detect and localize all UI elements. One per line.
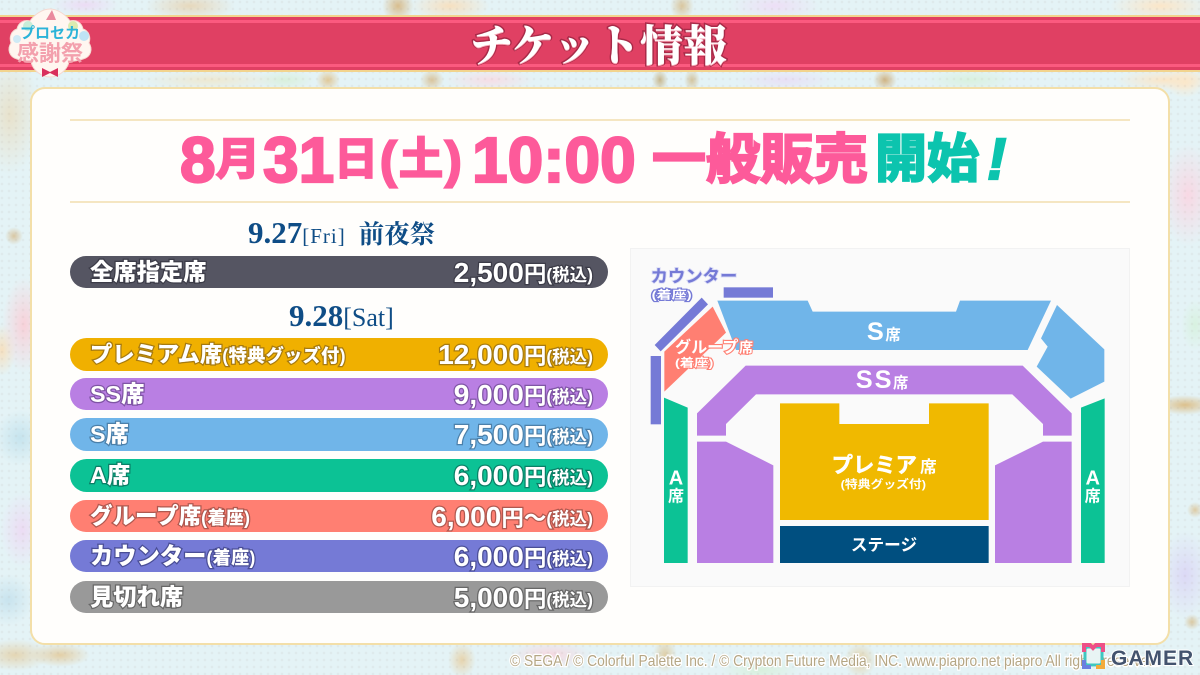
group seats: (着座) (675, 356, 714, 370)
group seats: グループ (675, 338, 738, 357)
price bar: SS: SS席 (90, 381, 144, 407)
price bar: obstructed view: 見切れ席 (90, 584, 183, 610)
price bar: group (70, 500, 608, 532)
date heading: 9.27: 9.27[Fri] 前夜祭 (248, 215, 435, 251)
premium seats (780, 403, 989, 520)
headline: sale start: 8 (180, 124, 216, 196)
headline: sale start: ( (380, 132, 397, 188)
logo: プロセカ (20, 25, 80, 42)
copyright: © SEGA / © Colorful Palette Inc. / © Crypton Future Media, INC. www.piapro.net piapro All rights reserved. (510, 653, 1160, 670)
headline: sale start: ) (445, 132, 462, 188)
header banner (0, 15, 1200, 72)
logo (8, 8, 92, 78)
premium seats: プレミア (832, 454, 917, 478)
price bar: counter: カウンター(着座) (90, 543, 256, 569)
price bar: A: A席 (90, 462, 130, 488)
price bar: S: 7,500円(税込) (454, 419, 593, 450)
A seats: 席 (1085, 487, 1101, 505)
price bar: premium (70, 338, 608, 371)
A seats: A (669, 468, 683, 490)
headline: sale start (180, 124, 1007, 196)
headline: sale start: 開始 (875, 131, 979, 189)
S seats (717, 301, 1104, 399)
headline: sale start: 土 (399, 135, 443, 184)
price bar: all reserved: 全席指定席 (90, 259, 206, 285)
stage (780, 526, 989, 563)
counter seats: カウンター (651, 266, 737, 286)
counter seats: (着座) (652, 288, 692, 302)
S seats: 席 (885, 326, 901, 344)
price bar: premium: 12,000円(税込) (438, 339, 593, 370)
price bar: all reserved: 2,500円(税込) (454, 257, 593, 288)
price bar: group: グループ席(着座) (90, 504, 250, 529)
SS seats: 席 (893, 374, 908, 392)
price bar: A (70, 459, 608, 492)
A seats (664, 398, 1105, 563)
price bar: obstructed view (70, 581, 608, 613)
date heading: 9.28: 9.28[Sat] (289, 298, 394, 333)
price bar: group: 6,000円～(税込) (431, 501, 593, 532)
price bar: premium: プレミアム席(特典グッズ付) (90, 342, 346, 367)
price bar: all reserved (70, 256, 608, 288)
price bar: S: S席 (90, 421, 129, 447)
headline: sale start: 日 (334, 135, 378, 184)
A seats: A (1085, 468, 1100, 490)
price bar: A: 6,000円(税込) (454, 460, 593, 491)
seat map (630, 248, 1130, 587)
icon: GAMER watermark: GAMER (1111, 647, 1194, 670)
group seats: 席 (739, 340, 753, 356)
price bar: SS (70, 378, 608, 410)
headline: sale start: 31 (263, 124, 334, 196)
headline: sale start: ! (987, 127, 1006, 192)
title: チケット情報 (470, 13, 727, 74)
price bar: counter (70, 540, 608, 572)
S seats: S (867, 318, 884, 346)
group seats (664, 307, 753, 392)
headline: sale start: 一般販売 (652, 130, 868, 190)
price bar: obstructed view: 5,000円(税込) (454, 582, 593, 613)
price bar: counter: 6,000円(税込) (454, 541, 593, 572)
main panel (30, 87, 1170, 645)
premium seats: 席 (920, 458, 937, 477)
SS seats: SS (856, 366, 894, 394)
counter seats (651, 266, 773, 424)
SS seats (697, 366, 1072, 563)
headline: sale start: 10:00 (472, 124, 636, 196)
price bar: S (70, 418, 608, 451)
premium seats: (特典グッズ付) (841, 477, 926, 491)
price bar: SS: 9,000円(税込) (454, 379, 593, 410)
logo: 感謝祭 (17, 41, 83, 66)
icon: GAMER watermark (1082, 643, 1194, 670)
A seats: 席 (668, 487, 684, 505)
stage: ステージ (851, 536, 917, 555)
headline: sale start: 月 (216, 135, 260, 184)
